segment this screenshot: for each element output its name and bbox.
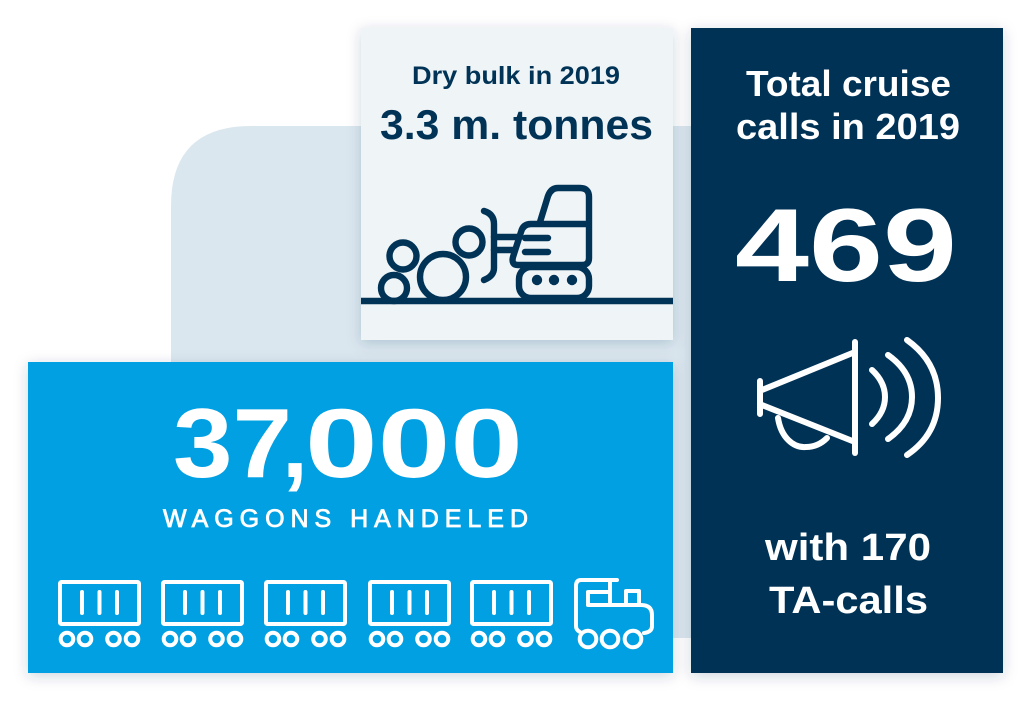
value: 37,000: 000 <box>305 388 523 498</box>
panel: waggons <box>28 362 673 673</box>
icon: wagon 1 <box>60 582 139 645</box>
value: 37,000 <box>173 388 523 498</box>
heading: dry bulk in 2019: Dry bulk in 2019 <box>412 62 620 90</box>
icon: bulldozer pushing boulders <box>361 188 673 301</box>
icon: wagon 5 <box>472 582 551 645</box>
heading: total cruise calls in 2019: calls in 2019 <box>736 106 960 147</box>
panel: dry bulk <box>361 28 673 340</box>
value: 3.3 m. tonnes: 3.3 m. tonnes <box>380 101 653 148</box>
value: 37,000: , <box>282 393 308 497</box>
heading: total cruise calls in 2019: Total cruise <box>746 63 951 104</box>
icon: megaphone <box>760 340 938 455</box>
panel: cruise calls <box>691 28 1003 673</box>
label: waggons handeled: WAGGONS HANDELED <box>163 505 528 533</box>
icon: wagon 2 <box>163 582 242 645</box>
background rounded shape <box>171 126 691 638</box>
icon: locomotive <box>576 580 652 647</box>
icon: wagon 3 <box>266 582 345 645</box>
value: 469: 469 <box>735 188 957 304</box>
text: with 170 TA-calls <box>764 527 931 622</box>
icon: wagon 4 <box>370 582 449 645</box>
value: 37,000: 37 <box>173 388 292 498</box>
text: with 170 TA-calls: TA-calls <box>769 580 928 622</box>
heading: total cruise calls in 2019 <box>736 63 960 147</box>
text: with 170 TA-calls: with 170 <box>764 527 931 569</box>
